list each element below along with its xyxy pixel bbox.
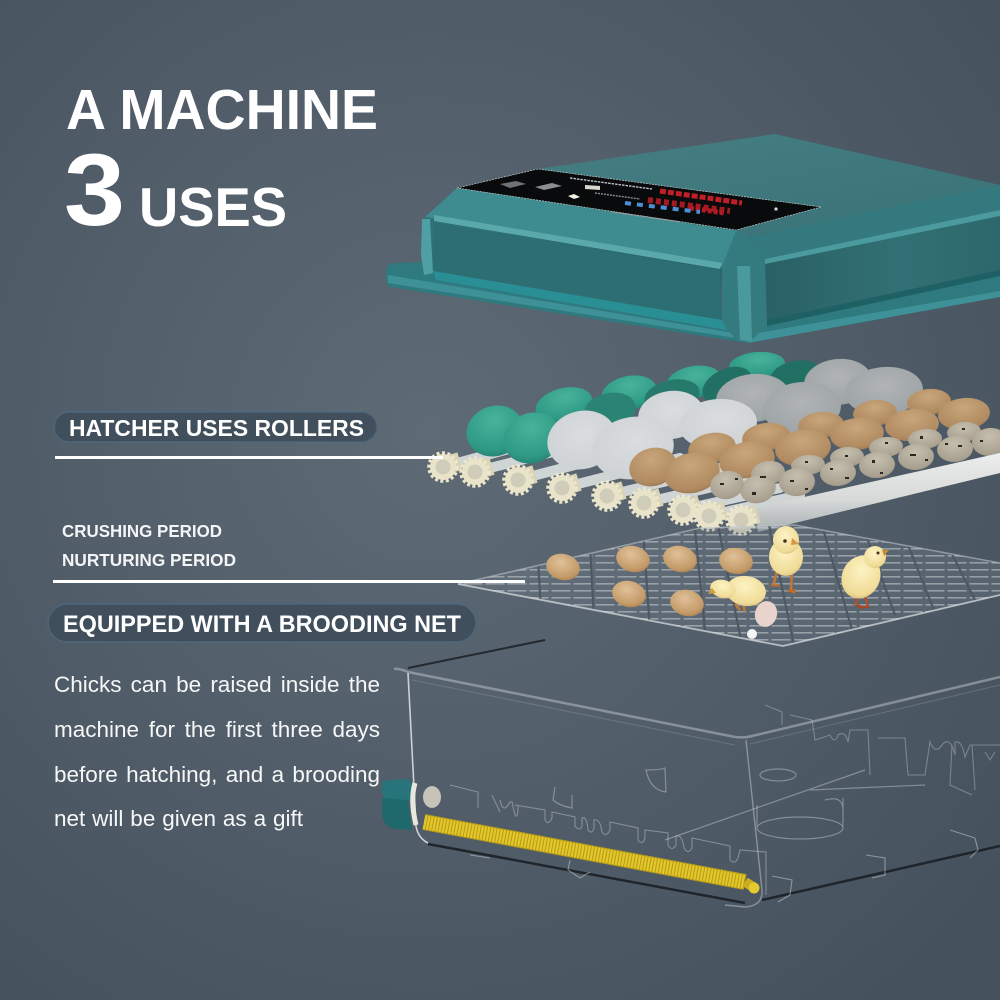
box slots [450, 785, 766, 895]
leader line: net [53, 580, 525, 583]
incubator lid [386, 134, 1000, 343]
description text: before hatching, and a brooding [54, 762, 380, 787]
description text: machine for the first three days [54, 717, 380, 742]
inner holes [553, 768, 925, 840]
teal knob [382, 779, 441, 830]
white spot [747, 629, 757, 639]
description text: net will be given as a gift [54, 806, 303, 831]
tan eggs [625, 387, 992, 498]
label: equipped with a brooding net [48, 604, 476, 642]
box left edge [408, 673, 428, 843]
label: hatcher uses rollers: HATCHER USES ROLLERS [69, 415, 364, 441]
net surface [458, 524, 1000, 647]
lid front face [425, 188, 736, 322]
box rim [394, 669, 1000, 737]
numeral 3: 3 [64, 133, 125, 247]
lid corner [722, 231, 767, 343]
transparent base box [382, 640, 1000, 907]
label: crushing period: CRUSHING PERIOD [62, 521, 222, 541]
lid top surface [457, 134, 1000, 237]
teal eggs [459, 350, 821, 471]
description text: Chicks can be raised inside the [54, 672, 380, 697]
brooding net [458, 524, 1000, 647]
leader line: rollers [55, 456, 443, 459]
title line 2: USES [139, 176, 287, 238]
roller gears [429, 453, 758, 534]
control panel [457, 169, 821, 230]
description text [54, 672, 380, 831]
thin rollers [450, 435, 800, 514]
yellow screw [424, 822, 760, 894]
label: equipped with a brooding net: EQUIPPED WITH A BROODING NET [63, 611, 461, 638]
front roller [755, 453, 1000, 532]
quail eggs [707, 421, 1000, 507]
title line 1: A MACHINE [66, 78, 378, 142]
box bottom edges [428, 844, 745, 903]
grey and white eggs [541, 356, 925, 486]
label: nurturing period: NURTURING PERIOD [62, 550, 236, 570]
side chick [834, 546, 889, 609]
net eggs [543, 542, 755, 620]
box corner [725, 740, 762, 907]
small pink egg [752, 599, 780, 629]
pecking chick [708, 573, 768, 612]
lid right face [750, 185, 1000, 320]
standing chick [768, 526, 803, 594]
title [64, 78, 378, 247]
lid flange [386, 262, 1000, 343]
egg tray with rollers [429, 350, 1000, 534]
